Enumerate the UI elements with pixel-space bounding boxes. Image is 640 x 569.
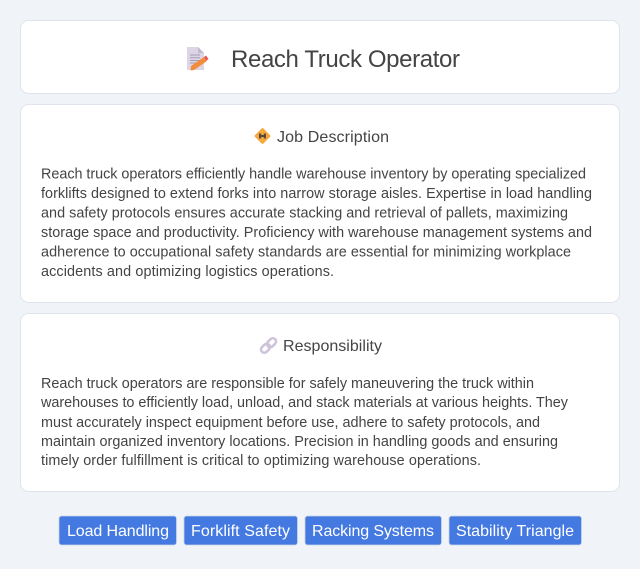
text block: job description xyxy=(41,166,592,280)
text block: job description: adherence to occupational safety standards are essential for minimizing workplace xyxy=(41,244,571,260)
tag: stability triangle: Stability Triangle xyxy=(456,523,574,540)
panel: responsibility xyxy=(20,314,620,492)
tag: racking systems xyxy=(305,516,442,545)
tag: stability triangle xyxy=(449,516,582,545)
heading: responsibility: Responsibility xyxy=(283,338,382,355)
icon: orange diamond sign xyxy=(254,128,271,144)
heading: job description: Job Description xyxy=(277,129,389,146)
text block: job description: and safety protocols ensures accurate stacking and retrieval of pallets, maximizing xyxy=(41,206,568,222)
icon: chain link xyxy=(260,337,277,354)
text block: responsibility xyxy=(40,376,569,469)
text block: job description: Reach truck operators efficiently handle warehouse inventory by operating specialized xyxy=(41,166,586,182)
text block: job description: accidents and optimizing logistics operations. xyxy=(41,264,334,280)
panel: title header xyxy=(20,20,620,94)
text block: job description: forklifts designed to extend forks into narrow storage aisles. Expertise in load handling xyxy=(41,186,592,202)
title: Reach Truck Operator xyxy=(231,46,460,73)
text block: job description: storage space and productivity. Proficiency with warehouse management systems and xyxy=(41,225,592,241)
text block: responsibility: warehouses to efficiently load, unload, and stack materials at various heights. They xyxy=(40,395,569,411)
panel: job description xyxy=(20,104,620,302)
tag: forklift safety: Forklift Safety xyxy=(191,523,290,540)
icon: memo with pencil xyxy=(187,47,208,70)
tag: racking systems: Racking Systems xyxy=(312,523,434,540)
text block: responsibility: maintain organized inventory locations. Precision in handling goods and ensuring xyxy=(41,434,558,450)
text block: responsibility: must accurately inspect equipment before use, adhere to safety protocols, and xyxy=(41,415,540,431)
tag: load handling xyxy=(59,516,176,545)
text block: responsibility: timely order fulfillment is critical to optimizing warehouse operations. xyxy=(41,453,481,469)
tag: load handling: Load Handling xyxy=(67,523,169,540)
tag: forklift safety xyxy=(184,516,298,545)
text block: responsibility: Reach truck operators are responsible for safely maneuvering the truck within xyxy=(41,376,534,392)
